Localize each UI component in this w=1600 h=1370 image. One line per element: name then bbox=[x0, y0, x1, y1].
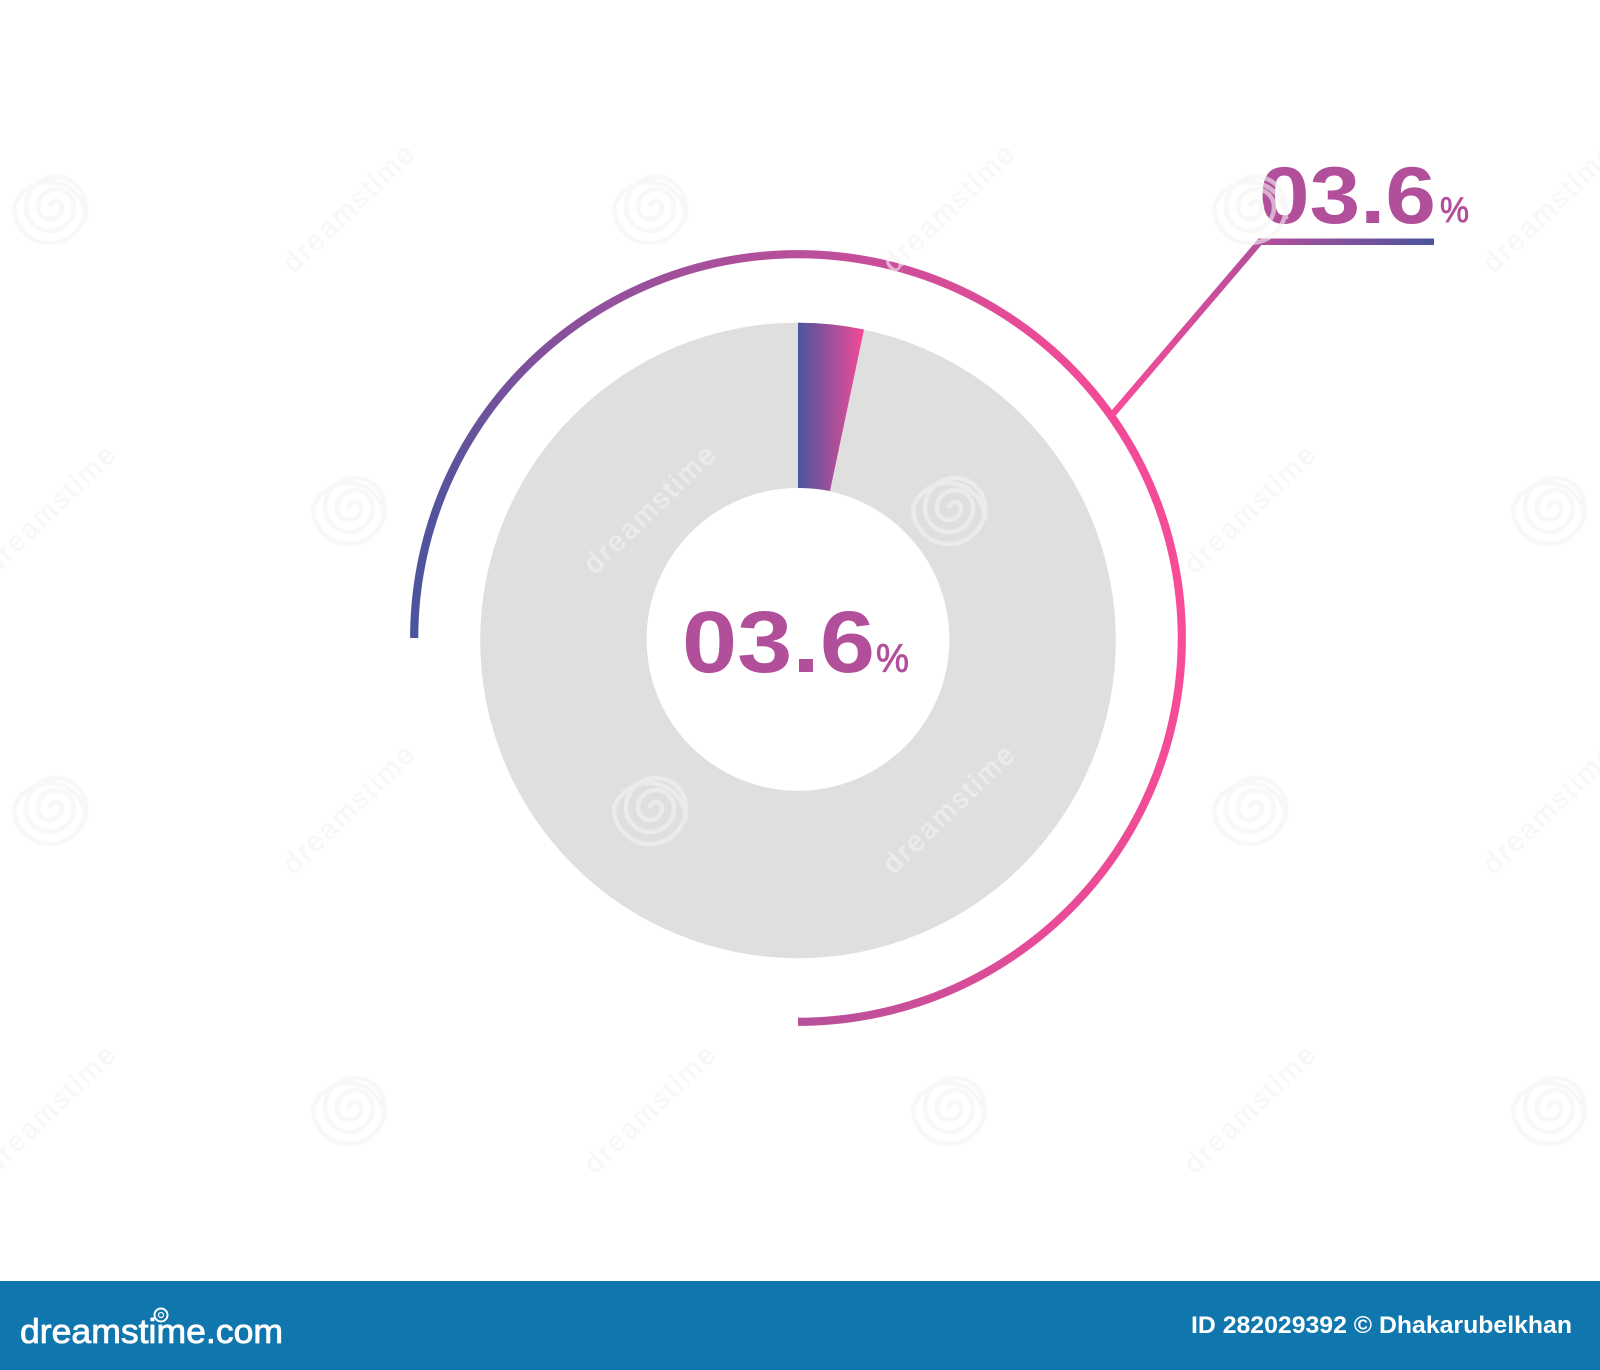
donut centre hole bbox=[647, 488, 949, 791]
center value: 03.6 bbox=[682, 594, 875, 691]
watermark layer: dreamstime bbox=[1177, 439, 1321, 579]
watermark layer bbox=[0, 138, 1600, 1179]
center value: % bbox=[876, 637, 909, 681]
watermark layer: dreamstime bbox=[876, 138, 1020, 278]
watermark layer: dreamstime bbox=[577, 1039, 721, 1179]
footer bar bbox=[0, 1281, 1600, 1370]
watermark layer: dreamstime bbox=[577, 439, 721, 579]
callout value: 03.6 bbox=[1259, 151, 1436, 241]
highlighted 3.6 percent slice bbox=[798, 323, 864, 491]
watermark layer: dreamstime bbox=[276, 138, 420, 278]
callout value: % bbox=[1440, 191, 1469, 230]
footer image credit: ID 282029392 © Dhakarubelkhan bbox=[1191, 1312, 1572, 1339]
watermark layer: dreamstime bbox=[876, 739, 1020, 879]
footer logo: dreamstime.com bbox=[20, 1313, 283, 1351]
donut base disc bbox=[480, 323, 1116, 958]
watermark layer: dreamstime bbox=[1177, 1039, 1321, 1179]
leader line bbox=[1112, 242, 1434, 415]
donut chart bbox=[480, 323, 1116, 958]
circular progress arc bbox=[410, 250, 1186, 1026]
watermark layer: dreamstime bbox=[276, 739, 420, 879]
